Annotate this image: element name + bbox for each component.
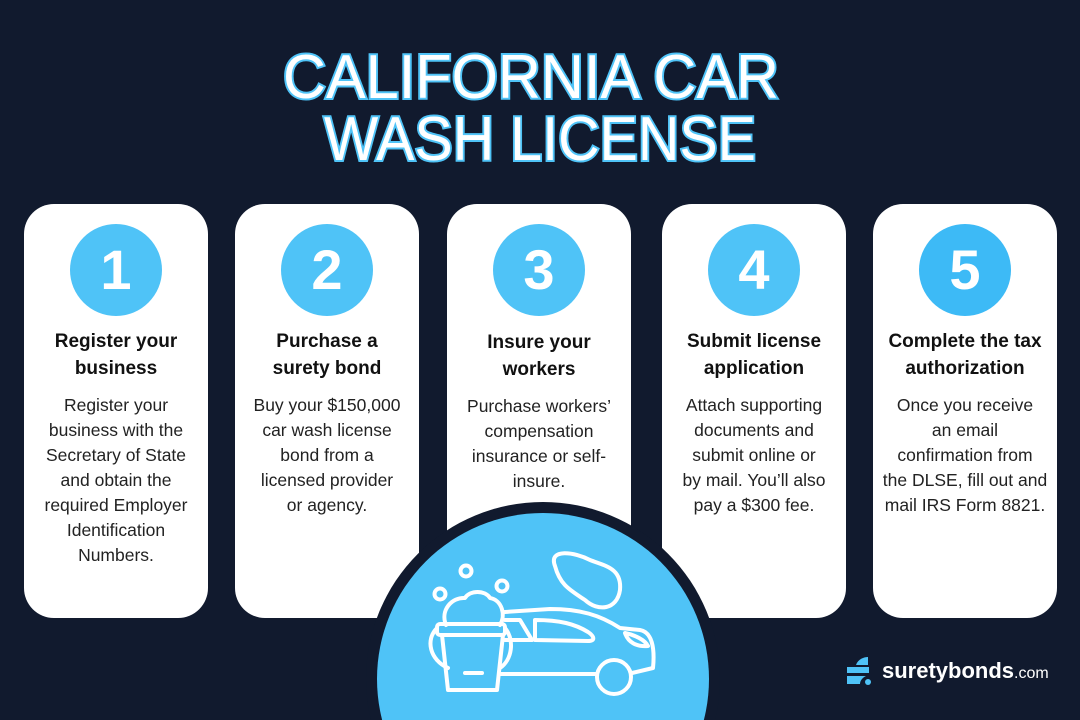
text 2: or agency. bbox=[287, 495, 367, 515]
number 4: 4 bbox=[738, 238, 770, 301]
number 5: 5 bbox=[949, 238, 981, 301]
text 4: documents and bbox=[694, 420, 814, 440]
text 2 bbox=[254, 331, 400, 515]
text 5: authorization bbox=[905, 358, 1025, 379]
text 3 bbox=[467, 332, 611, 491]
text 3: Insure your bbox=[487, 332, 591, 353]
card 1 bbox=[24, 204, 208, 618]
text 3: insure. bbox=[513, 471, 565, 491]
text 3: Purchase workers’ bbox=[467, 396, 611, 416]
number 1: 1 bbox=[100, 238, 132, 301]
text 1 bbox=[44, 331, 188, 565]
number 2: 2 bbox=[311, 238, 343, 301]
text 5: confirmation from bbox=[897, 445, 1033, 465]
text 4: pay a $300 fee. bbox=[694, 495, 814, 515]
text 2: bond from a bbox=[280, 445, 374, 465]
text 5: mail IRS Form 8821. bbox=[885, 495, 1045, 515]
text 5: Once you receive bbox=[897, 395, 1033, 415]
text 1: Identification bbox=[67, 520, 165, 540]
text 2: car wash license bbox=[262, 420, 392, 440]
text 1: Register your bbox=[64, 395, 168, 415]
text 1: required Employer bbox=[44, 495, 187, 515]
text 4 bbox=[682, 331, 826, 515]
number 3: 3 bbox=[523, 238, 555, 301]
text 4: by mail. You’ll also bbox=[682, 470, 826, 490]
text 1: business bbox=[75, 358, 157, 379]
text 2: surety bond bbox=[273, 358, 381, 379]
text 3: workers bbox=[503, 359, 575, 380]
title: CALIFORNIA CAR bbox=[283, 43, 779, 112]
number 4 bbox=[708, 224, 800, 316]
title bbox=[283, 43, 780, 174]
text 4: Submit license bbox=[687, 331, 821, 352]
text 3: compensation bbox=[485, 421, 593, 441]
text 5: Complete the tax bbox=[888, 331, 1042, 352]
text 1: and obtain the bbox=[61, 470, 171, 490]
text 1: Secretary of State bbox=[46, 445, 186, 465]
card 5 bbox=[873, 204, 1057, 618]
text 1: Numbers. bbox=[78, 545, 154, 565]
text 1: business with the bbox=[49, 420, 183, 440]
text 5: the DLSE, fill out and bbox=[883, 470, 1047, 490]
number 5 bbox=[919, 224, 1011, 316]
text 2: Purchase a bbox=[276, 331, 378, 352]
logo bbox=[847, 657, 1049, 685]
text 2: licensed provider bbox=[261, 470, 393, 490]
logo text: suretybonds.com bbox=[882, 658, 1049, 683]
text 3: insurance or self- bbox=[472, 446, 606, 466]
text 5: an email bbox=[932, 420, 998, 440]
card 3 bbox=[447, 204, 631, 618]
text 4: Attach supporting bbox=[686, 395, 822, 415]
logo icon bbox=[847, 657, 871, 685]
card 4 bbox=[662, 204, 846, 618]
text 2: Buy your $150,000 bbox=[254, 395, 400, 415]
text 4: submit online or bbox=[692, 445, 816, 465]
title: WASH LICENSE bbox=[324, 105, 756, 174]
number 3 bbox=[493, 224, 585, 316]
card 2 bbox=[235, 204, 419, 618]
text 5 bbox=[883, 331, 1047, 515]
text 1: Register your bbox=[55, 331, 177, 352]
number 2 bbox=[281, 224, 373, 316]
text 4: application bbox=[704, 358, 804, 379]
number 1 bbox=[70, 224, 162, 316]
